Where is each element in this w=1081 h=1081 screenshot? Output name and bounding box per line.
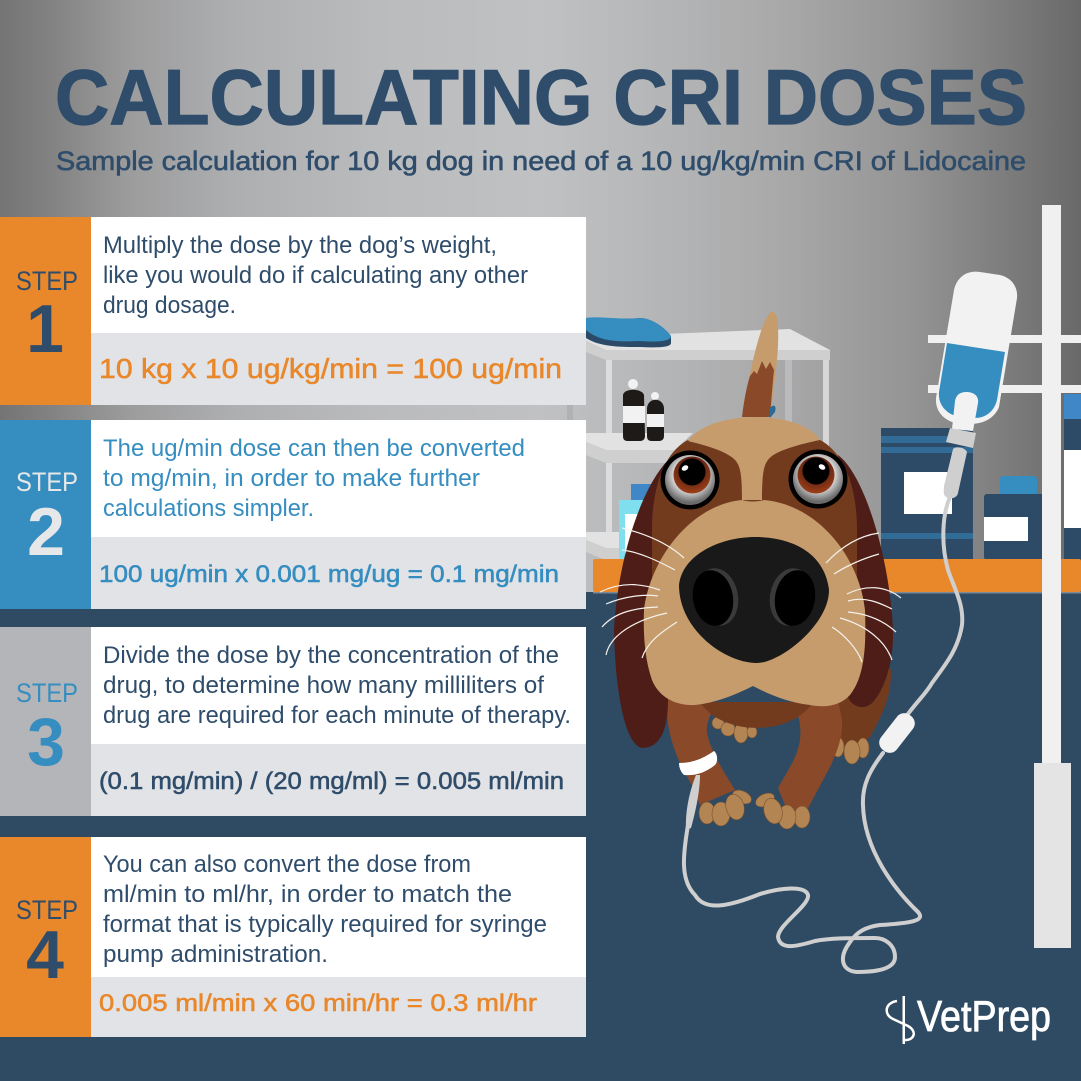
dog muzzle — [644, 500, 865, 706]
catheter — [686, 775, 700, 830]
panel: step 1: STEP — [16, 266, 78, 296]
panel: step 4: You can also convert the dose from — [103, 851, 471, 878]
dog nose — [679, 537, 829, 663]
panel: step 3: drug, to determine how many milliliters of — [103, 672, 544, 699]
dog left eye — [660, 450, 720, 510]
panel: step 1: like you would do if calculating any other — [103, 262, 528, 289]
icon: medicine box small — [984, 476, 1044, 560]
dog front legs — [667, 695, 842, 810]
dog head — [652, 440, 857, 620]
logo: VetPrep: VetPrep — [917, 992, 1051, 1041]
panel: step 3: STEP — [16, 678, 78, 708]
panel: step 3: Divide the dose by the concentration of the — [103, 642, 559, 669]
icon: cyan box — [619, 484, 659, 560]
dog body rear — [800, 660, 891, 748]
panel: step 1: drug dosage. — [103, 292, 236, 319]
panel: step 4: STEP — [16, 895, 78, 925]
dog whiskers — [600, 528, 901, 662]
panel: step 2: 2 — [27, 494, 65, 570]
panel: step 1: 1 — [26, 291, 64, 367]
dog forehead — [688, 417, 820, 500]
panel: step 3: (0.1 mg/min) / (20 mg/ml) = 0.005 ml/min — [99, 768, 564, 795]
icon: small bottle — [647, 392, 664, 441]
title: CALCULATING CRI DOSES — [55, 53, 1027, 141]
IV pole — [928, 205, 1081, 948]
dog ear right — [830, 455, 893, 707]
icon: medicine box large — [881, 428, 973, 560]
panel: step 2 — [0, 420, 586, 609]
icon: large bottle — [623, 379, 645, 441]
background wall — [0, 0, 1081, 592]
panel: step 2: The ug/min dose can then be converted — [103, 435, 525, 462]
floor — [0, 592, 1081, 1081]
subtitle: Sample calculation for 10 kg dog in need of a 10 ug/kg/min CRI of Lidocaine — [56, 146, 1026, 176]
panel: step 4: ml/min to ml/hr, in order to match the — [103, 881, 512, 908]
dog tail — [742, 312, 778, 418]
panel: step 1: Multiply the dose by the dog’s weight, — [103, 232, 497, 259]
panel: step 2: calculations simpler. — [103, 495, 314, 522]
panel: step 1 — [0, 217, 586, 405]
dog front paws — [699, 787, 810, 829]
panel: step 2: STEP — [16, 467, 78, 497]
panel: step 4: 4 — [26, 917, 64, 993]
panel: step 3 — [0, 627, 586, 816]
tube clamp — [876, 710, 918, 756]
IV tube — [684, 497, 962, 972]
dog chin — [700, 702, 813, 728]
panel: step 3: 3 — [27, 704, 65, 780]
panel: step 4: format that is typically required for syringe — [103, 911, 547, 938]
panel: step 2: to mg/min, in order to make further — [103, 465, 480, 492]
panel: step 2: 100 ug/min x 0.001 mg/ug = 0.1 mg/min — [99, 561, 559, 588]
wrist bandage — [679, 751, 717, 775]
logo: VetPrep — [887, 992, 1051, 1044]
panel: step 1: 10 kg x 10 ug/kg/min = 100 ug/min — [99, 353, 562, 384]
icon: blue cushion — [586, 317, 671, 347]
dog ear left — [614, 460, 680, 748]
counter — [593, 559, 1081, 594]
panel: step 3: drug are required for each minute of therapy. — [103, 702, 571, 729]
icon: medicine box right edge — [1064, 394, 1081, 560]
panel: step 4: 0.005 ml/min x 60 min/hr = 0.3 ml/hr — [99, 990, 537, 1017]
panel: step 4 — [0, 837, 586, 1037]
icon: IV bag — [936, 272, 1017, 498]
panel: step 4: pump administration. — [103, 941, 328, 968]
dog rear paws — [712, 717, 869, 764]
dog right eye — [788, 450, 848, 508]
illustration: metal shelf — [567, 329, 830, 560]
